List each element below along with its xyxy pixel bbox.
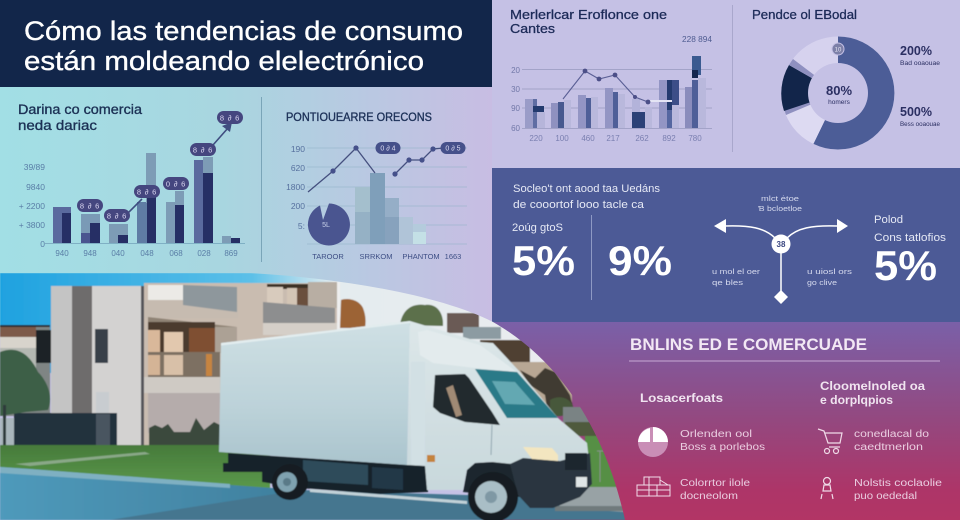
heading: Merlerlcar Eroflonce one (510, 7, 667, 22)
title: Cómo las tendencias de consumo (24, 16, 463, 46)
value pills: 8 ∂ 6 (80, 202, 100, 210)
grid and labels: 90 (511, 104, 521, 113)
x axis labels: 100 (555, 134, 569, 143)
icon: cart (818, 429, 842, 454)
column headings: Losacerfoats (640, 391, 723, 405)
heading (510, 7, 667, 36)
rear wheel (271, 470, 308, 500)
main building (51, 282, 340, 448)
background trees and buildings (340, 299, 625, 488)
list item (854, 429, 930, 453)
column headings: Cloomelnoled oa (820, 379, 925, 393)
stat right (874, 214, 947, 289)
bumper (510, 453, 592, 508)
top value: 228 894 (682, 35, 713, 44)
list item: Orlenden ool (680, 429, 752, 440)
heading: Darina co comercia (18, 102, 143, 117)
panel: line and bars chart (286, 110, 467, 261)
x axis labels: PHANTOM (402, 252, 440, 261)
panel: bottom right gradient (492, 322, 960, 520)
heading (18, 102, 143, 133)
road and curb (0, 466, 277, 520)
legend values: 500% (900, 104, 932, 119)
bars (53, 153, 240, 243)
stat right: 5% (874, 242, 937, 289)
x axis labels: 028 (197, 249, 211, 258)
truck (219, 321, 592, 520)
value pills: 0 ∂ 4 (380, 146, 396, 152)
diagram captions (712, 194, 852, 287)
value pills: 0 ∂ 6 (166, 180, 186, 188)
x axis labels: 948 (83, 249, 97, 258)
front wheel (468, 472, 518, 520)
donut: 80% (826, 83, 852, 98)
grille (565, 453, 587, 470)
column headings: e dorplqpios (820, 393, 893, 407)
x axis labels: 869 (224, 249, 238, 258)
column headings (640, 379, 925, 407)
panel: e-commerce bar chart (18, 102, 245, 258)
x axis labels: 048 (140, 249, 154, 258)
wheel arch (463, 462, 520, 497)
stat right: Polod (874, 214, 903, 226)
donut: homers (828, 99, 851, 106)
legend values (900, 43, 940, 128)
panel: background band (0, 87, 492, 332)
grid and labels: 60 (511, 124, 521, 133)
windshield (475, 369, 558, 418)
list item: docneolom (680, 491, 738, 502)
list item (854, 478, 943, 502)
panel: title banner (0, 0, 492, 87)
branching arrows diagram (714, 219, 848, 304)
y axis labels: + 2200 (19, 201, 45, 211)
x axis labels: 220 (529, 134, 543, 143)
y axis labels: + 3800 (19, 220, 45, 230)
diagram captions: go clive (807, 278, 837, 287)
marker light (427, 455, 435, 462)
heading: BNLINS ED E COMERCUADE (630, 336, 867, 354)
heading: Pendce ol EBodal (752, 7, 857, 22)
gridlines and axis labels (286, 144, 467, 244)
value pills: 8 ∂ 6 (137, 188, 157, 196)
value pills: 8 ∂ 6 (107, 212, 127, 220)
panel: grouped bars with line (510, 7, 713, 143)
diagram captions: u uiosl ors (807, 267, 852, 276)
translucent bars (355, 173, 426, 244)
pie icon (308, 204, 350, 245)
cargo box (219, 321, 410, 465)
donut: 10 (835, 48, 842, 54)
bars (525, 56, 706, 128)
x axis labels: 940 (55, 249, 69, 258)
stat middle: 9% (608, 237, 672, 284)
y axis labels (19, 162, 45, 249)
truck chassis (223, 453, 467, 504)
sky (0, 273, 546, 374)
title (24, 16, 463, 76)
line series (563, 69, 650, 104)
left tree (0, 350, 50, 416)
door line (491, 425, 492, 455)
title: están moldeando elelectrónico (24, 46, 424, 76)
grid and labels: 20 (511, 66, 521, 75)
heading: PONTIOUEARRE ORECONS (286, 110, 432, 124)
x axis labels (529, 134, 702, 143)
list item: puo oededal (854, 491, 917, 502)
y axis labels: 39/89 (24, 162, 45, 172)
value pills: 8 ∂ 6 (193, 146, 213, 154)
y axis labels: 0 (40, 239, 45, 249)
stat right: Cons tatlofios (874, 232, 947, 244)
icon: pie (638, 427, 668, 457)
legend values: Bad ooaouae (900, 60, 940, 67)
x axis labels: 068 (169, 249, 183, 258)
x axis labels (55, 249, 238, 258)
x axis labels: 780 (688, 134, 702, 143)
icon: person (821, 478, 833, 499)
cab (407, 321, 590, 490)
x axis labels: 460 (581, 134, 595, 143)
license plate (576, 477, 587, 487)
pie icon: 5L (322, 222, 330, 229)
heading (513, 183, 661, 211)
x axis labels: 262 (635, 134, 649, 143)
grid and labels (511, 66, 712, 133)
heading: de cooortof looo tacle ca (513, 199, 645, 211)
diagram captions: mlct ėtoe (761, 194, 799, 203)
x axis labels (312, 252, 461, 261)
panel: top right lavender (492, 0, 960, 168)
value pills: 0 ∂ 5 (445, 146, 461, 152)
fence (14, 413, 117, 449)
heading: Cantes (510, 21, 556, 36)
gridlines and axis labels: 190 (291, 144, 305, 154)
front strip (411, 362, 425, 465)
panel: blue statistics (492, 168, 960, 322)
heading: neda dariac (18, 118, 97, 133)
value pills (77, 111, 243, 222)
list item (680, 429, 765, 453)
panel: delivery truck photo (0, 273, 630, 520)
small left building (0, 325, 51, 446)
list item: Boss a porlebos (680, 442, 765, 453)
branching arrows diagram: 38 (777, 240, 786, 249)
diagram captions: Ɓ bcloetloe (758, 204, 802, 213)
shrubs (148, 418, 220, 446)
panel: e-commerce trends (629, 336, 943, 502)
list item (680, 478, 751, 502)
list item: Colorrtor ilole (680, 478, 751, 489)
list item: Nolstis coclaolie (854, 478, 943, 489)
diagram captions: u mol el oer (712, 267, 761, 276)
trend arrows (125, 122, 232, 216)
grass (0, 445, 270, 491)
legend values: Bess ooaouae (900, 121, 940, 128)
gridlines and axis labels: 5: (298, 221, 305, 231)
headlight (523, 447, 558, 461)
side window (433, 374, 500, 425)
donut (781, 36, 894, 150)
gridlines and axis labels: 1800 (286, 182, 305, 192)
grid and labels: 30 (511, 85, 521, 94)
icon: parcels (637, 477, 670, 496)
x axis labels: SRRKOM (360, 252, 392, 261)
stat left: 2oúg gtoS (512, 222, 563, 234)
y axis labels: 9840 (26, 182, 45, 192)
gridlines and axis labels: 620 (291, 163, 305, 173)
value pills: 8 ∂ 6 (220, 114, 240, 122)
x axis labels: 217 (606, 134, 620, 143)
gridlines and axis labels: 200 (291, 201, 305, 211)
x axis labels: 1663 (445, 252, 461, 261)
cab deflector (420, 343, 515, 372)
list item: caedtmerlon (854, 442, 923, 453)
legend values: 200% (900, 43, 932, 58)
list item: conedlacal do (854, 429, 930, 440)
diagram captions: qe bles (712, 278, 743, 287)
line series (308, 145, 444, 192)
x axis labels: TAROOR (312, 252, 344, 261)
heading: Socleo't ont aood taa Uedáns (513, 183, 661, 195)
stat left: 5% (512, 237, 575, 284)
x axis labels: 892 (662, 134, 676, 143)
panel: donut chart (752, 7, 940, 150)
value pills (376, 142, 466, 154)
x axis labels: 040 (111, 249, 125, 258)
